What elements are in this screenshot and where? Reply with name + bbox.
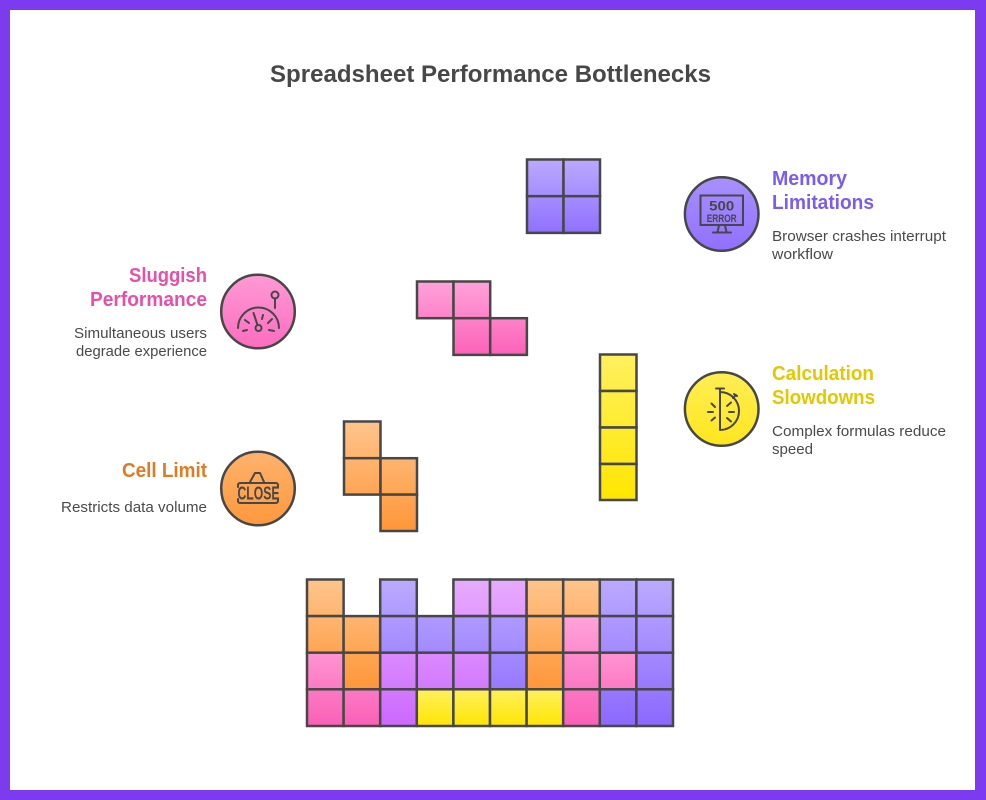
label: calculation slowdowns: [772, 363, 946, 458]
label: sluggish performance: [74, 265, 207, 360]
icon: 500 error monitor: 500: [709, 198, 734, 214]
block: orange S piece: [344, 422, 417, 531]
icon: 500 error monitor: [685, 177, 758, 251]
label: sluggish performance: Sluggish: [129, 265, 207, 287]
label: sluggish performance: Simultaneous users: [74, 325, 207, 342]
label: sluggish performance: degrade experience: [76, 343, 207, 360]
title: Spreadsheet Performance Bottlenecks: [270, 61, 711, 88]
label: calculation slowdowns: Complex formulas reduce: [772, 423, 946, 440]
block: purple square piece: [527, 160, 600, 233]
label: sluggish performance: Performance: [90, 289, 207, 311]
label: memory limitations: Limitations: [772, 192, 874, 214]
label: memory limitations: [771, 168, 947, 263]
icon: speedometer: [221, 275, 295, 348]
label: calculation slowdowns: Calculation: [772, 363, 874, 385]
icon: close sign: [221, 452, 295, 525]
label: cell limit: [61, 460, 207, 516]
icon: half stopwatch: [685, 372, 758, 446]
icon: close sign: CLOSE: [238, 484, 280, 504]
label: memory limitations: Memory: [772, 168, 848, 190]
label: cell limit: Restricts data volume: [61, 499, 207, 516]
label: cell limit: Cell Limit: [122, 460, 207, 482]
stacked block grid: [307, 580, 673, 726]
label: memory limitations: workflow: [771, 246, 833, 263]
block: yellow bar piece: [600, 354, 636, 500]
block: pink Z piece: [417, 282, 527, 355]
label: calculation slowdowns: Slowdowns: [772, 387, 875, 409]
icon: 500 error monitor: ERROR: [707, 213, 737, 225]
label: calculation slowdowns: speed: [772, 441, 813, 458]
label: memory limitations: Browser crashes interrupt: [772, 228, 947, 245]
